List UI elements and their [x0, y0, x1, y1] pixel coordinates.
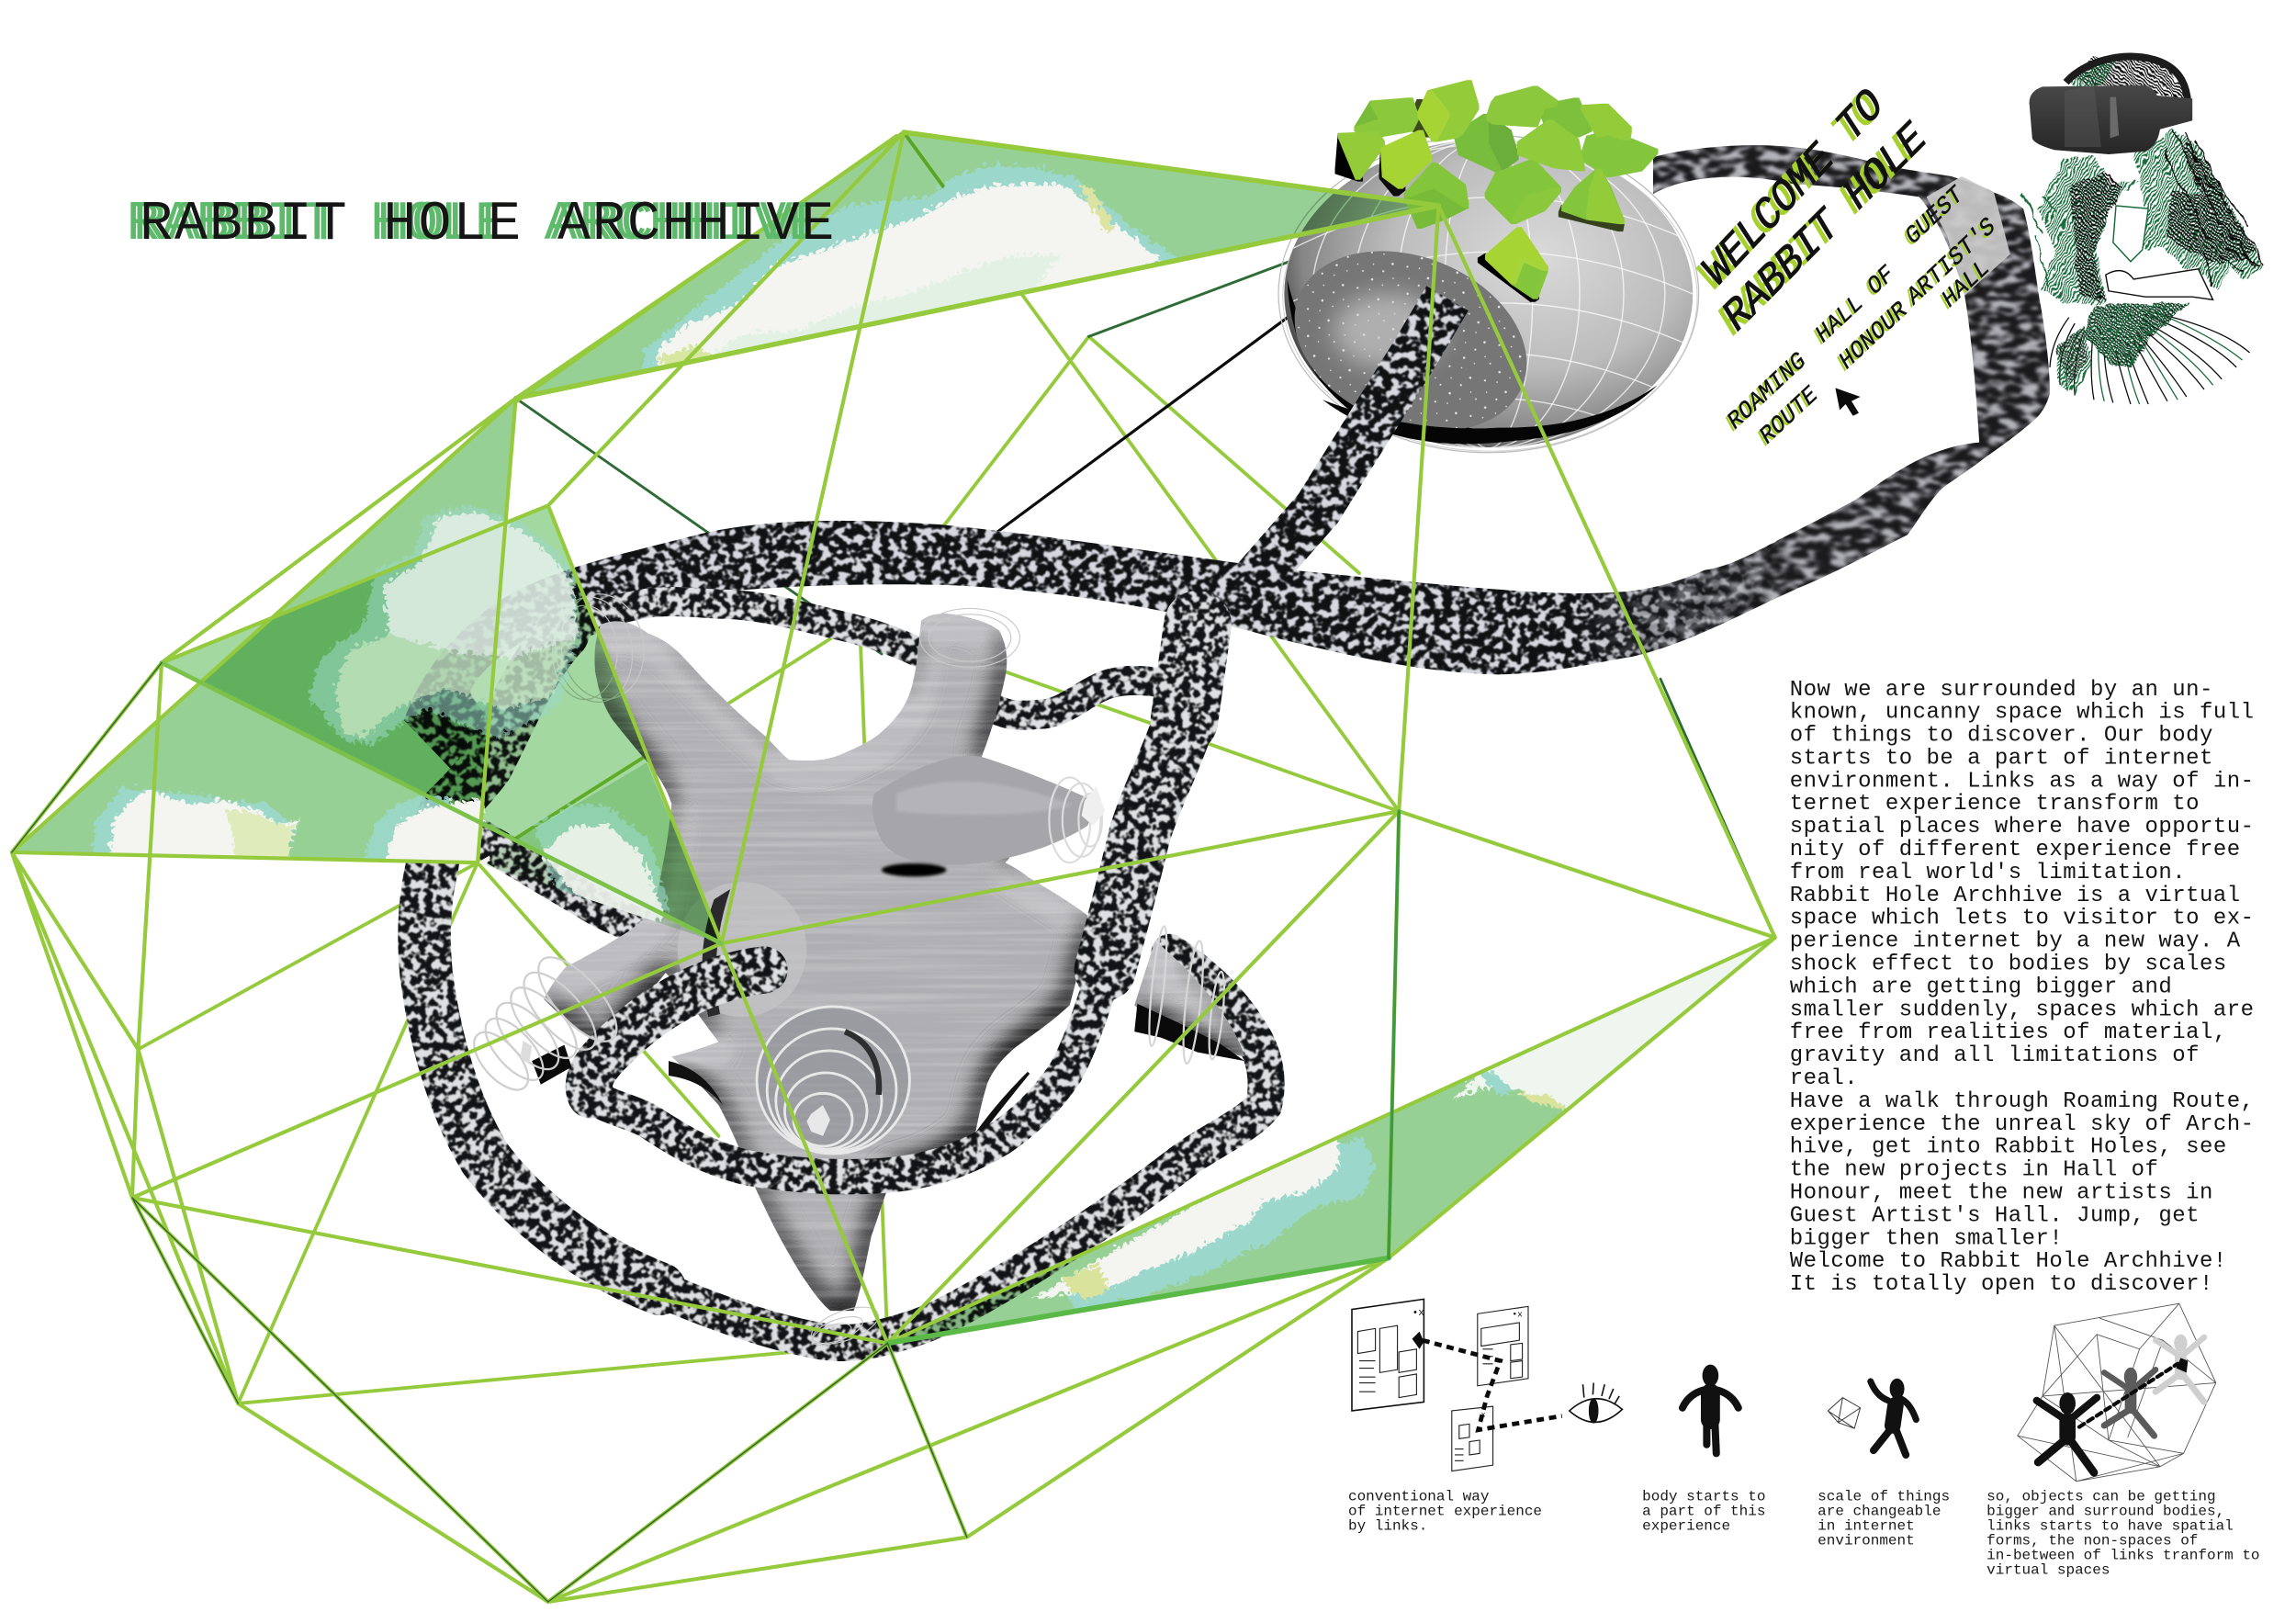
rotated route labels: HONOUR [1833, 297, 1909, 379]
caption: scale of things: scale of things [1818, 1489, 1950, 1505]
body text: Welcome to Rabbit Hole Archhive! [1790, 1249, 2227, 1274]
figure: body with small polyhedron [1828, 1379, 1916, 1455]
rotated route labels: ARTIST'S [1903, 210, 1999, 312]
body text: of things to discover. Our body [1790, 724, 2213, 749]
ribbon: upper-right grey loop [1653, 145, 2050, 591]
hatched hair and dress [2022, 53, 2263, 394]
rotated route labels: ARTIST'S [1901, 213, 1998, 314]
rotated route labels: HONOUR [1836, 295, 1911, 377]
body text: shock effect to bodies by scales [1790, 952, 2227, 977]
body text: experience the unreal sky of Arch- [1790, 1112, 2254, 1137]
rotated route labels: ROUTE [1754, 381, 1819, 454]
page 2: •x [1512, 1310, 1523, 1320]
body text: Guest Artist's Hall. Jump, get [1790, 1203, 2200, 1228]
caption: scale of things: environment [1818, 1533, 1915, 1550]
caption: objects getting bigger: bigger and surround bodies, [1986, 1504, 2224, 1520]
body text: Rabbit Hole Archhive is a virtual [1790, 884, 2241, 908]
rotated route labels: ROAMING [1724, 345, 1810, 437]
body text: spatial places where have opportu- [1790, 815, 2254, 840]
caption: objects getting bigger: in-between of links tranform to [1986, 1548, 2260, 1564]
faint figure [2155, 1335, 2204, 1402]
caption: scale of things: are changeable [1818, 1504, 1941, 1520]
caption: conventional way: of internet experience [1348, 1504, 1542, 1520]
caption: conventional way: conventional way [1348, 1489, 1490, 1505]
rotated route labels: HALL [1936, 254, 1991, 317]
caption: objects getting bigger: so, objects can be getting [1986, 1489, 2216, 1505]
figure: bodies inside wire cubes [2018, 1303, 2216, 1482]
strap [2066, 57, 2188, 103]
body text: bigger then smaller! [1790, 1226, 2063, 1251]
ribbon: inner loop over sculpture [589, 625, 1198, 1177]
black figure [2037, 1392, 2097, 1472]
rotated welcome heading: WELCOME TO [1693, 84, 1887, 304]
body text: perience internet by a new way. A [1790, 930, 2241, 954]
title: RABBIT HOLE ARCHHIVE [127, 194, 823, 256]
sphere with moon window [1267, 135, 1699, 464]
main body [544, 614, 1093, 1311]
title: RABBIT HOLE ARCHHIVE [133, 194, 829, 256]
caption: body starts: a part of this [1642, 1504, 1765, 1520]
eye [1570, 1383, 1622, 1423]
body text: space which lets to visitor to ex- [1790, 907, 2254, 931]
caption: objects getting bigger: links starts to have spatial [1986, 1518, 2234, 1535]
caption: body starts: body starts to [1642, 1489, 1765, 1505]
ribbon: sphere link to main band [1246, 299, 1447, 591]
body text: from real world's limitation. [1790, 861, 2186, 885]
figure: standing body [1683, 1365, 1739, 1453]
caption: body starts: experience [1642, 1518, 1730, 1535]
pane: lower right [904, 946, 1761, 1337]
rotated welcome heading: RABBIT HOLE [1713, 117, 1929, 350]
rotated route labels [1722, 179, 1999, 454]
ribbon: roaming route main band [404, 521, 1791, 786]
dashed link path [1423, 1340, 1562, 1430]
rotated route labels: GUEST [1902, 179, 1967, 252]
pane: top triangle [516, 132, 1438, 399]
body text: environment. Links as a way of in- [1790, 769, 2254, 794]
pane: left cluster [12, 399, 722, 943]
page 3: x [1481, 1411, 1486, 1419]
neck and arm [2106, 206, 2213, 299]
rotated route labels: HALL OF [1810, 261, 1896, 353]
body text: Honour, meet the new artists in [1790, 1180, 2213, 1205]
moon disc [1288, 251, 1526, 428]
page 1: •x [1412, 1308, 1424, 1319]
body text: free from realities of material, [1790, 1020, 2227, 1045]
page 1 [1352, 1299, 1424, 1411]
green panes with clouds [12, 132, 1775, 1343]
ribbon: blend into grey loop [1583, 535, 1796, 663]
rotated route labels: HALL [1939, 253, 1993, 315]
skirt fan lines [2050, 311, 2250, 404]
body text: Have a walk through Roaming Route, [1790, 1089, 2254, 1114]
page 2 [1478, 1306, 1528, 1386]
body text: real. [1790, 1066, 1858, 1091]
title: RABBIT HOLE ARCHHIVE [140, 194, 836, 256]
headset [2030, 85, 2192, 154]
tail right [1134, 941, 1244, 1056]
rotated welcome heading: RABBIT HOLE [1717, 112, 1933, 345]
caption: objects getting bigger: virtual spaces [1986, 1562, 2110, 1579]
horn right [872, 756, 1099, 865]
icon: cursor arrow [1835, 388, 1861, 416]
caption: scale of things: in internet [1818, 1518, 1915, 1535]
ribbon: outer loop [424, 602, 1266, 1343]
caption: objects getting bigger: forms, the non-spaces of [1986, 1533, 2198, 1550]
rotated welcome heading: WELCOME TO [1697, 79, 1891, 299]
rotated route labels: GUEST [1899, 182, 1964, 254]
wireframe: front lines [12, 132, 1775, 1602]
body text: the new projects in Hall of [1790, 1158, 2158, 1183]
woman in VR headset [2022, 53, 2263, 404]
body text: smaller suddenly, spaces which are [1790, 997, 2254, 1022]
polyhedra cluster on sphere [1337, 83, 1656, 299]
springs and rings on sculpture arms [465, 587, 1244, 1351]
caption: conventional way: by links. [1348, 1518, 1427, 1535]
wireframe: back lines [138, 132, 1775, 1403]
sculpture: grey star form [544, 614, 1244, 1311]
body text: starts to be a part of internet [1790, 746, 2213, 771]
rotated route labels: ROAMING [1722, 347, 1807, 439]
rotated route labels: ROUTE [1756, 379, 1821, 452]
body text: nity of different experience free [1790, 838, 2241, 862]
body text: known, uncanny space which is full [1790, 701, 2254, 726]
rotated route labels: HALL OF [1812, 259, 1898, 350]
grey figure [2104, 1368, 2155, 1436]
body text: gravity and all limitations of [1790, 1043, 2200, 1068]
body text: Now we are surrounded by an un- [1790, 678, 2213, 703]
body text: hive, get into Rabbit Holes, see [1790, 1135, 2227, 1160]
body text: It is totally open to discover! [1790, 1272, 2213, 1297]
page 3 [1452, 1406, 1493, 1471]
black blocks [532, 1004, 1244, 1085]
body text: which are getting bigger and [1790, 975, 2172, 999]
body text: ternet experience transform to [1790, 792, 2200, 817]
arrowhead [1412, 1332, 1424, 1349]
diagram: browser pages and eye [1352, 1299, 1622, 1471]
